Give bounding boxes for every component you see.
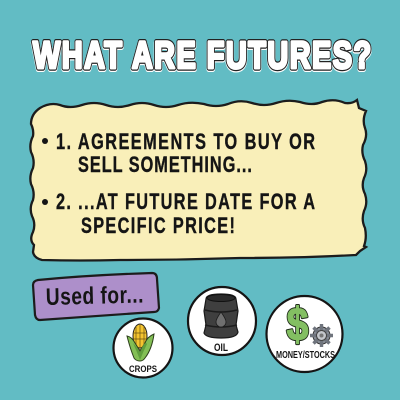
icon: oil: OIL xyxy=(214,342,228,354)
title: WHAT ARE FUTURES? xyxy=(33,35,371,78)
corn cob xyxy=(133,324,147,348)
corn husk xyxy=(127,334,154,361)
icon: money and stocks: MONEY/STOCKS xyxy=(276,350,335,361)
title: WHAT ARE FUTURES? xyxy=(33,34,371,77)
bullet 2 xyxy=(42,190,315,239)
oil barrel xyxy=(204,294,238,338)
label: used for: Used for... xyxy=(45,280,144,311)
icon: oil xyxy=(188,287,256,355)
dollar sign: $ xyxy=(287,299,309,351)
bullet 1: 1. AGREEMENTS TO BUY OR xyxy=(56,130,315,155)
bullet 1 xyxy=(42,130,315,178)
panel: definition note xyxy=(30,100,366,260)
gear xyxy=(310,324,333,347)
dollar sign: $ xyxy=(287,299,309,351)
icon: crops: CROPS xyxy=(129,364,157,374)
icon: crops xyxy=(114,318,172,378)
wavy note background xyxy=(30,100,366,260)
bullet 2: SPECIFIC PRICE! xyxy=(81,214,235,239)
bullet 1: SELL SOMETHING... xyxy=(78,153,252,178)
icon: money and stocks xyxy=(266,296,342,372)
oil drop xyxy=(216,312,226,327)
title: WHAT ARE FUTURES? xyxy=(33,34,371,77)
bullet 2: 2. ...AT FUTURE DATE FOR A xyxy=(56,190,315,215)
label: used for xyxy=(33,273,159,320)
